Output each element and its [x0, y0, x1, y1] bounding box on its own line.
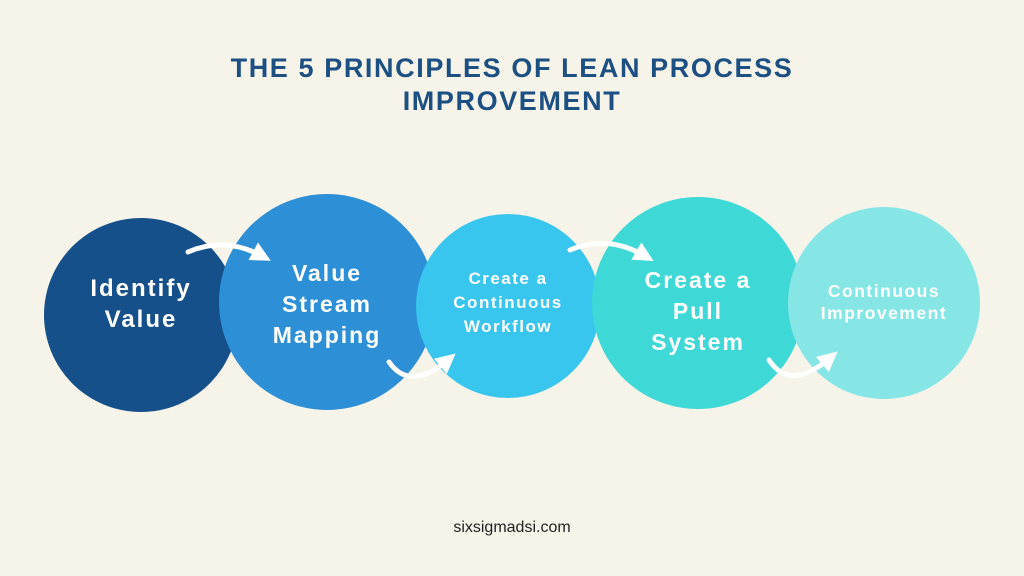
footer: website: sixsigmadsi.com [453, 519, 571, 536]
circle 5: Continuous Improvement: Improvement [821, 303, 947, 323]
circle 1: Identify Value: Value [105, 306, 177, 333]
circle 4: Create a Pull System: Create a [645, 267, 751, 293]
title: THE 5 PRINCIPLES OF LEAN PROCESS [231, 53, 793, 83]
circle 5: Continuous Improvement [788, 207, 980, 399]
title: IMPROVEMENT [403, 86, 621, 116]
circle 3: Create a Continuous Workflow: Workflow [464, 317, 552, 336]
circle 3: Create a Continuous Workflow: Continuous [453, 293, 563, 312]
circle 5: Continuous Improvement: Continuous [828, 281, 940, 301]
arrow 4 [769, 358, 830, 376]
arrow 3 [570, 243, 645, 256]
circle 4: Create a Pull System [592, 197, 804, 409]
circle 4: Create a Pull System: Pull [673, 298, 723, 324]
title [230, 53, 793, 116]
circle 2: Value Stream Mapping [219, 194, 435, 410]
circle 4: Create a Pull System: System [651, 329, 745, 355]
arrow 1 [188, 245, 262, 256]
circle 2: Value Stream Mapping: Stream [282, 291, 372, 317]
arrow 2 [389, 360, 448, 377]
circle 3: Create a Continuous Workflow [416, 214, 600, 398]
circle 2: Value Stream Mapping: Value [292, 260, 362, 286]
circle 3: Create a Continuous Workflow: Create a [468, 269, 548, 288]
circle 2: Value Stream Mapping: Mapping [273, 322, 381, 348]
circle 1: Identify Value: Identify [90, 275, 192, 302]
circle 1: Identify Value [44, 218, 238, 412]
